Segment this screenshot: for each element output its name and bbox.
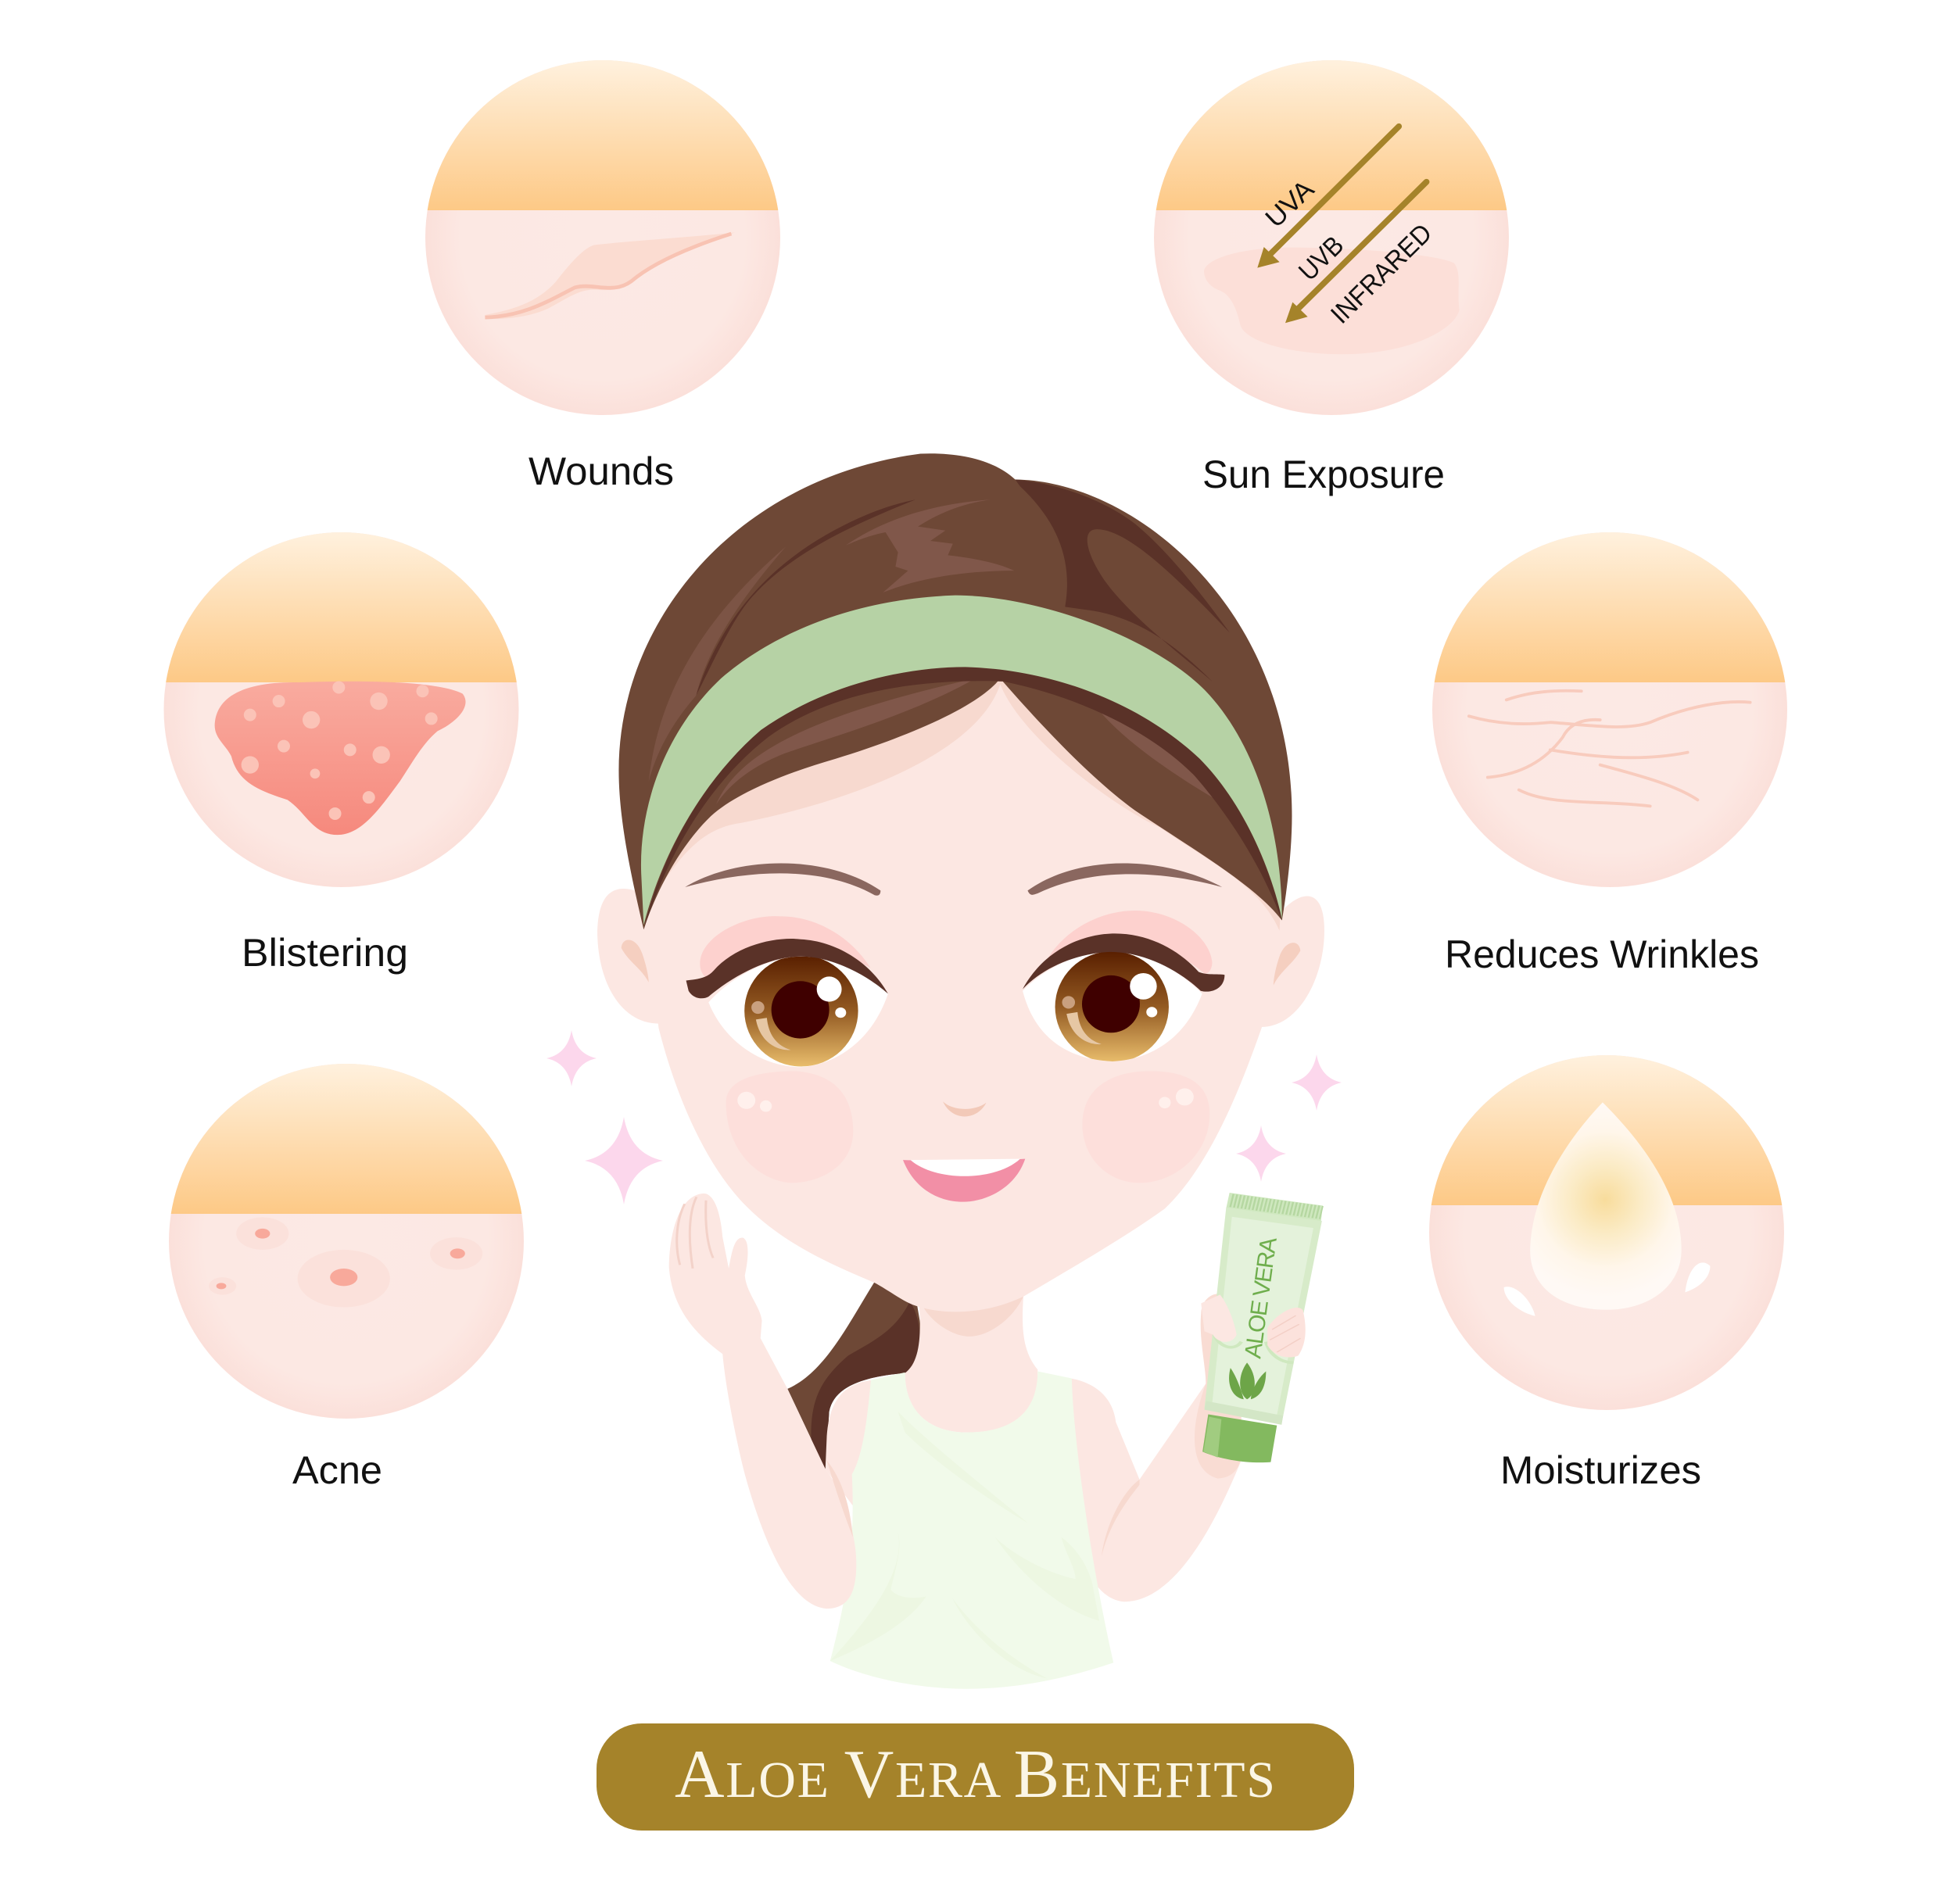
nose xyxy=(943,1101,987,1116)
tube crimp xyxy=(1226,1193,1323,1222)
tube body xyxy=(1205,1208,1322,1425)
left shoulder xyxy=(826,1380,872,1505)
label: UVB: UVB xyxy=(1293,231,1349,287)
label: wounds: Wounds xyxy=(529,449,674,493)
panel: wounds xyxy=(425,60,780,415)
headband xyxy=(641,596,1282,929)
arm: right arm holding tube xyxy=(1052,1378,1242,1602)
face xyxy=(647,610,1282,1312)
tube label text: ALOE VERA xyxy=(1240,1236,1282,1360)
arrows: sun rays xyxy=(1257,127,1427,323)
product: aloe vera tube xyxy=(1195,1193,1323,1479)
icon: blister patch xyxy=(215,681,466,835)
label: acne: Acne xyxy=(292,1448,382,1492)
cheeks xyxy=(726,1071,1209,1183)
panel: sun exposure xyxy=(1154,60,1509,415)
top: green tank top xyxy=(830,1372,1113,1689)
ponytail xyxy=(787,1283,922,1469)
arm: raised left hand xyxy=(669,1194,856,1609)
panel: moisturizes xyxy=(1429,1055,1784,1410)
label: infrared: INFRARED xyxy=(1325,218,1438,330)
sparkles xyxy=(546,1030,1342,1204)
character: head xyxy=(597,453,1324,1312)
icon: acne spots xyxy=(209,1217,482,1308)
fingers xyxy=(1201,1294,1306,1362)
eyebrows xyxy=(685,863,1222,896)
icon: wrinkle lines xyxy=(1469,691,1750,806)
label: sun exposure: Sun Exposure xyxy=(1202,453,1445,496)
right eye xyxy=(1023,911,1224,1062)
tube cap xyxy=(1202,1414,1277,1462)
panel: acne xyxy=(169,1064,524,1419)
icon: moisture drop xyxy=(1504,1102,1710,1316)
character: body xyxy=(669,1194,1242,1689)
ears xyxy=(597,889,1324,1027)
mouth xyxy=(903,1159,1025,1202)
label: blistering: Blistering xyxy=(242,931,408,975)
label: moisturizes: Moisturizes xyxy=(1500,1448,1701,1492)
neck xyxy=(905,1297,1037,1433)
label: UVA: UVA xyxy=(1259,174,1320,234)
panel: blistering xyxy=(164,532,519,887)
hair shadow on forehead xyxy=(647,656,1285,931)
sun damaged skin patch xyxy=(1204,248,1460,354)
panel: reduces wrinkles xyxy=(1432,532,1787,887)
title text: ALOE VERA BENEFITS xyxy=(675,1737,1275,1813)
title banner xyxy=(597,1723,1354,1831)
hand behind tube xyxy=(1195,1294,1242,1479)
hair xyxy=(618,453,1292,929)
icon: wound scar xyxy=(485,232,735,319)
aloe plant logo xyxy=(1229,1362,1266,1399)
left eye xyxy=(686,916,888,1067)
label: reduces wrinkles: Reduces Wrinkles xyxy=(1445,932,1759,976)
